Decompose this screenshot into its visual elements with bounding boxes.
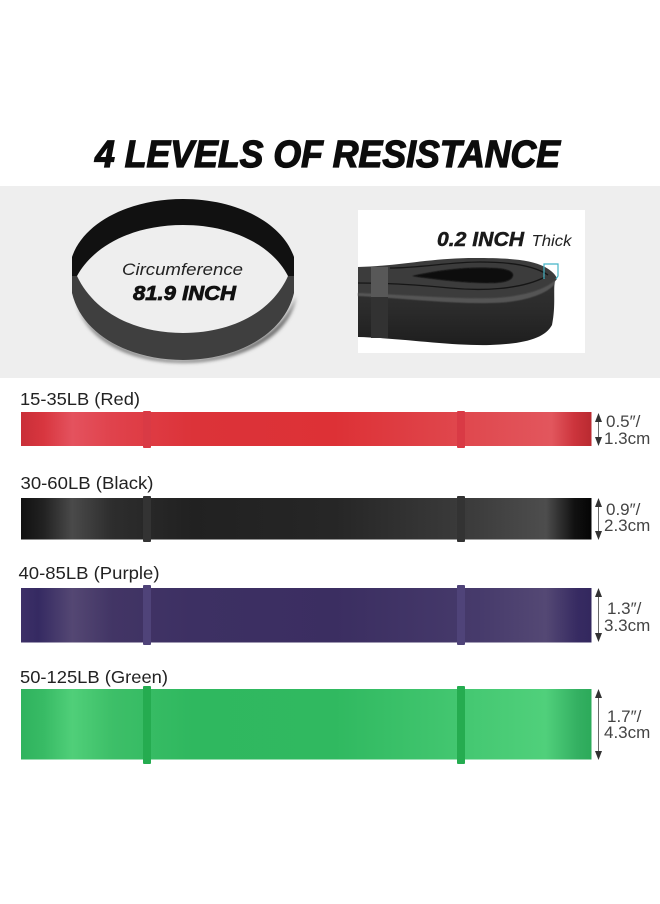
panel: dimensions background	[0, 186, 660, 378]
width text: 1.3″/	[607, 599, 642, 618]
band	[21, 412, 592, 446]
label: 30-60LB (Black)	[20, 473, 154, 493]
width text: 1.7″/	[607, 707, 642, 726]
ring shadow	[76, 296, 296, 362]
clip lower	[371, 297, 388, 338]
width text: 4.3cm	[604, 723, 650, 742]
width arrow	[598, 503, 600, 534]
width text: 1.3cm	[604, 429, 650, 448]
band	[21, 498, 592, 540]
band top surface	[358, 258, 557, 299]
thickness marker	[544, 264, 558, 279]
title: 4 LEVELS OF RESISTANCE	[94, 134, 562, 176]
width arrow	[598, 694, 600, 755]
band inner loop	[412, 268, 513, 283]
width text: 0.5″/	[606, 412, 641, 431]
ring front half	[72, 276, 294, 360]
width text	[604, 412, 650, 448]
width text	[604, 599, 650, 635]
row: red band	[20, 389, 650, 448]
clip upper	[371, 267, 388, 297]
arrow heads	[595, 498, 602, 540]
width text: 0.9″/	[606, 500, 641, 519]
photo background	[358, 210, 585, 353]
circumference value: 81.9 INCH	[133, 283, 237, 305]
clips	[143, 496, 465, 542]
label: 15-35LB (Red)	[20, 389, 140, 409]
row: black band	[20, 473, 650, 542]
row: purple band	[18, 563, 650, 645]
width text: 3.3cm	[604, 616, 650, 635]
width text	[604, 707, 650, 742]
ring diagram: circumference	[72, 199, 296, 362]
arrow heads	[595, 689, 602, 760]
circumference label: Circumference	[122, 260, 243, 279]
clips	[143, 411, 465, 448]
band	[21, 689, 592, 760]
band side wall	[358, 280, 555, 345]
width arrow	[598, 418, 600, 440]
label: 40-85LB (Purple)	[18, 563, 160, 583]
clips	[143, 585, 465, 645]
width text: 2.3cm	[604, 516, 650, 535]
band bright rim	[358, 280, 555, 303]
width text	[604, 500, 650, 535]
label: 50-125LB (Green)	[20, 667, 168, 687]
arrow heads	[595, 413, 602, 446]
row: green band	[20, 667, 650, 764]
arrow heads	[595, 588, 602, 642]
clips	[143, 686, 465, 764]
thickness value: 0.2 INCH	[437, 229, 525, 251]
band	[21, 588, 592, 642]
ring back half	[72, 199, 294, 276]
photo: band thickness	[358, 210, 585, 353]
band layer lines	[358, 262, 548, 289]
width arrow	[598, 593, 600, 637]
thick label: Thick	[532, 233, 573, 250]
retaining clip	[371, 267, 388, 338]
